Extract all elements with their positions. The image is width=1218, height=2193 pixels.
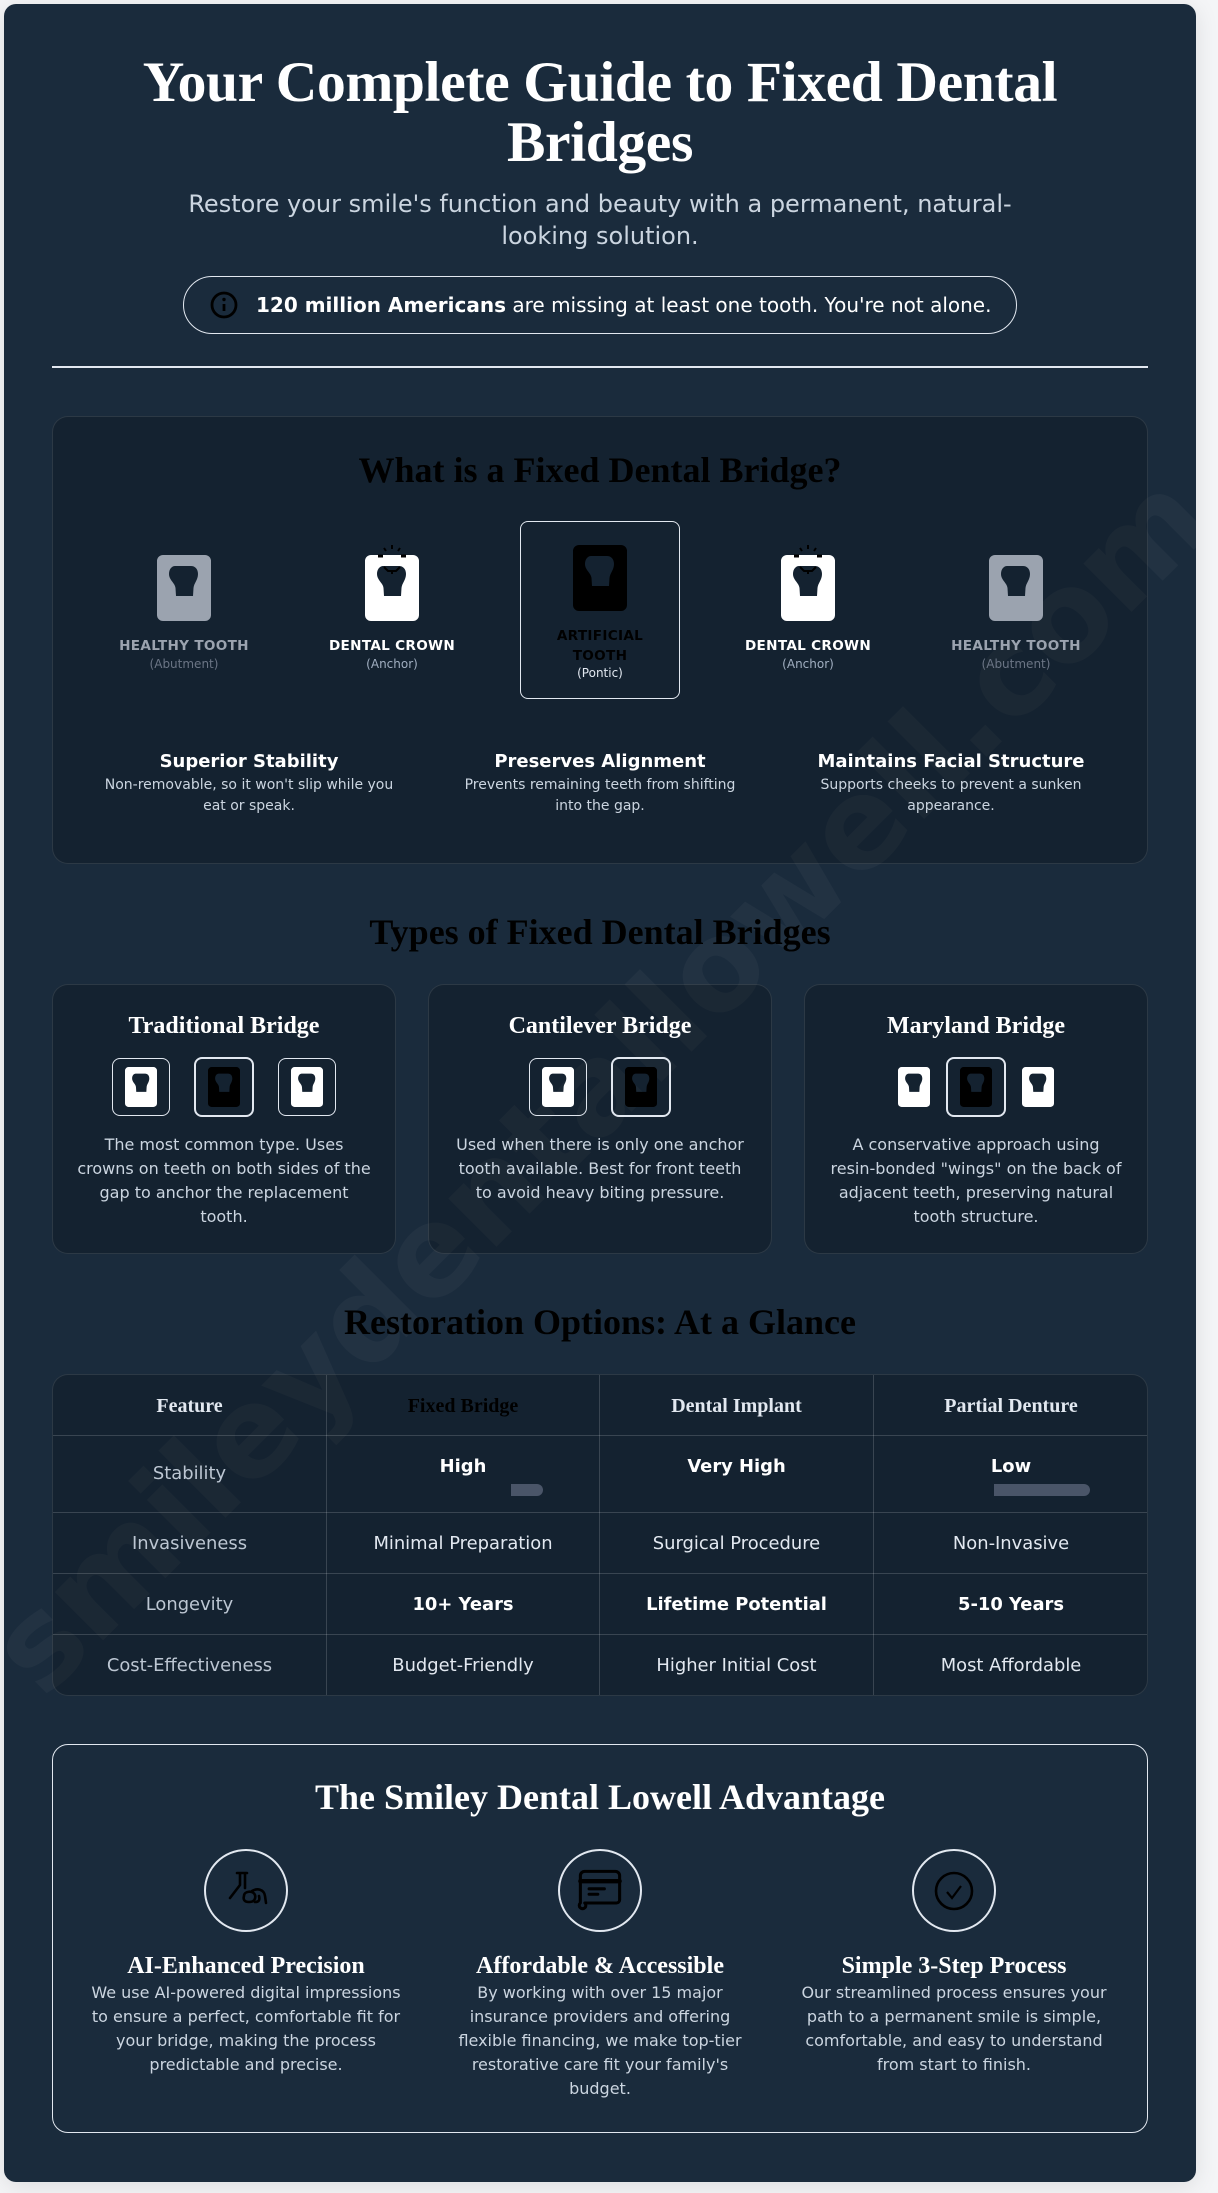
comparison table: Higher Initial Cost <box>656 1655 817 1676</box>
column text: predictable and precise. <box>149 2055 343 2074</box>
heading: restoration options: Restoration Options: At a Glance <box>344 1302 856 1342</box>
column text: flexible financing, we make top-tier <box>458 2031 742 2050</box>
diagram item: artificial tooth: TOOTH <box>573 648 627 664</box>
comparison table: High <box>440 1456 486 1477</box>
card text: A conservative approach using <box>852 1135 1100 1154</box>
comparison table <box>52 1374 1148 1696</box>
column text: By working with over 15 major <box>477 1983 723 2002</box>
bridge diagram <box>898 1057 1054 1117</box>
column: 3 step <box>801 1849 1107 2074</box>
diagram item: artificial tooth <box>520 521 680 699</box>
card text: Used when there is only one anchor <box>456 1135 744 1154</box>
diagram item: dental crown right <box>745 545 871 671</box>
benefit: superior stability <box>105 751 393 814</box>
diagram item: dental crown left: (Anchor) <box>366 657 418 671</box>
panel: traditional bridge <box>52 984 396 1254</box>
comparison table: 10+ Years <box>412 1594 514 1615</box>
comparison table: Low <box>991 1456 1031 1477</box>
card text <box>831 1135 1122 1226</box>
column heading: AI-Enhanced Precision <box>127 1953 365 1979</box>
row: cost: Cost-Effectiveness <box>107 1655 272 1676</box>
diagram item: artificial tooth: ARTIFICIAL <box>557 628 643 644</box>
subtitle <box>188 190 1012 250</box>
title <box>143 51 1057 174</box>
panel: cantilever bridge <box>428 984 772 1254</box>
benefit: superior stability: eat or speak. <box>203 798 295 814</box>
diagram item: healthy tooth right <box>951 555 1081 671</box>
column text <box>801 1983 1107 2074</box>
title: Your Complete Guide to Fixed Dental <box>143 51 1057 114</box>
advantage heading: The Smiley Dental Lowell Advantage <box>315 1777 885 1817</box>
diagram item: healthy tooth left: (Abutment) <box>150 657 218 671</box>
diagram item: dental crown right: DENTAL CROWN <box>745 638 871 654</box>
column text <box>458 1983 742 2098</box>
diagram item: artificial tooth: (Pontic) <box>577 666 623 680</box>
comparison table: Lifetime Potential <box>646 1594 827 1615</box>
header row: Feature <box>156 1395 223 1417</box>
card text: The most common type. Uses <box>105 1135 343 1154</box>
column text: Our streamlined process ensures your <box>801 1983 1107 2002</box>
card text: resin-bonded "wings" on the back of <box>831 1159 1121 1178</box>
column text: comfortable, and easy to understand <box>805 2031 1103 2050</box>
icon: crown sparkle <box>794 545 822 574</box>
comparison table: Fixed Bridge <box>408 1395 518 1417</box>
card text: to avoid heavy biting pressure. <box>476 1183 724 1202</box>
column text: to ensure a perfect, comfortable fit for <box>92 2007 400 2026</box>
column heading: Affordable & Accessible <box>476 1953 724 1979</box>
benefit: facial structure: Maintains Facial Structure <box>817 751 1084 772</box>
benefit: preserves alignment <box>465 751 735 814</box>
comparison table: Non-Invasive <box>953 1533 1069 1554</box>
column text <box>91 1983 401 2074</box>
card text <box>456 1135 744 1202</box>
card title: Traditional Bridge <box>129 1013 319 1039</box>
comparison table: Budget-Friendly <box>392 1655 534 1676</box>
bridge diagram <box>529 1057 671 1117</box>
panel: maryland bridge <box>804 984 1148 1254</box>
bridge diagram <box>112 1057 336 1117</box>
benefit: facial structure <box>817 751 1084 814</box>
icon: credit card <box>558 1849 642 1932</box>
card title: Maryland Bridge <box>887 1013 1065 1039</box>
column heading: Simple 3-Step Process <box>842 1953 1066 1979</box>
benefit: superior stability: Non-removable, so it won't slip while you <box>105 776 393 792</box>
diagram item: dental crown right: (Anchor) <box>782 657 834 671</box>
comparison table: Partial Denture <box>944 1395 1078 1417</box>
icon: flask and hand <box>204 1849 288 1932</box>
column text: path to a permanent smile is simple, <box>807 2007 1101 2026</box>
card text: adjacent teeth, preserving natural <box>839 1183 1113 1202</box>
stat pill <box>183 276 1017 334</box>
row: longevity: Longevity <box>146 1594 233 1615</box>
card text: tooth structure. <box>913 1207 1039 1226</box>
icon: info <box>210 292 238 318</box>
diagram item: healthy tooth right: HEALTHY TOOTH <box>951 638 1081 654</box>
benefit: superior stability: Superior Stability <box>160 751 338 772</box>
diagram item: healthy tooth left <box>119 555 249 671</box>
row: stability: Stability <box>153 1463 226 1484</box>
column: ai precision <box>91 1849 401 2074</box>
card text <box>77 1135 371 1226</box>
icon: check circle <box>912 1849 996 1932</box>
title: Bridges <box>507 111 693 174</box>
benefit: preserves alignment: Preserves Alignment <box>494 751 706 772</box>
benefit: facial structure: Supports cheeks to prevent a sunken <box>820 776 1082 792</box>
diagram item: healthy tooth right: (Abutment) <box>982 657 1050 671</box>
column text: restorative care fit your family's <box>472 2055 728 2074</box>
comparison table: Minimal Preparation <box>373 1533 553 1554</box>
subtitle: looking solution. <box>501 222 699 250</box>
heading: types: Types of Fixed Dental Bridges <box>369 912 831 952</box>
subtitle: Restore your smile's function and beauty with a permanent, natural- <box>188 190 1012 218</box>
card text: crowns on teeth on both sides of the <box>77 1159 371 1178</box>
comparison table: Most Affordable <box>941 1655 1081 1676</box>
column text: from start to finish. <box>877 2055 1031 2074</box>
comparison table: 5-10 Years <box>958 1594 1064 1615</box>
card text: tooth available. Best for front teeth <box>459 1159 741 1178</box>
diagram item: dental crown left: DENTAL CROWN <box>329 638 455 654</box>
comparison table: Very High <box>687 1456 786 1477</box>
comparison table: Dental Implant <box>671 1395 802 1417</box>
column text: insurance providers and offering <box>470 2007 730 2026</box>
benefit: preserves alignment: into the gap. <box>555 798 645 814</box>
benefit: preserves alignment: Prevents remaining teeth from shifting <box>465 776 735 792</box>
diagram item: healthy tooth left: HEALTHY TOOTH <box>119 638 249 654</box>
card text: gap to anchor the replacement <box>100 1183 348 1202</box>
stat text: 120 million Americans are missing at least one tooth. You're not alone. <box>256 293 991 317</box>
heading: what is a bridge: What is a Fixed Dental Bridge? <box>358 450 842 490</box>
column text: budget. <box>569 2079 631 2098</box>
column text: We use AI-powered digital impressions <box>91 1983 401 2002</box>
card title: Cantilever Bridge <box>509 1013 691 1039</box>
icon: crown sparkle <box>378 545 406 574</box>
benefit: facial structure: appearance. <box>907 798 995 814</box>
card text: tooth. <box>200 1207 248 1226</box>
panel: what is a fixed dental bridge <box>52 416 1148 864</box>
diagram item: dental crown left <box>329 545 455 671</box>
column: affordable <box>458 1849 742 2098</box>
column text: your bridge, making the process <box>116 2031 376 2050</box>
comparison table: Surgical Procedure <box>653 1533 820 1554</box>
row: invasiveness: Invasiveness <box>132 1533 247 1554</box>
panel: advantage <box>52 1744 1148 2133</box>
